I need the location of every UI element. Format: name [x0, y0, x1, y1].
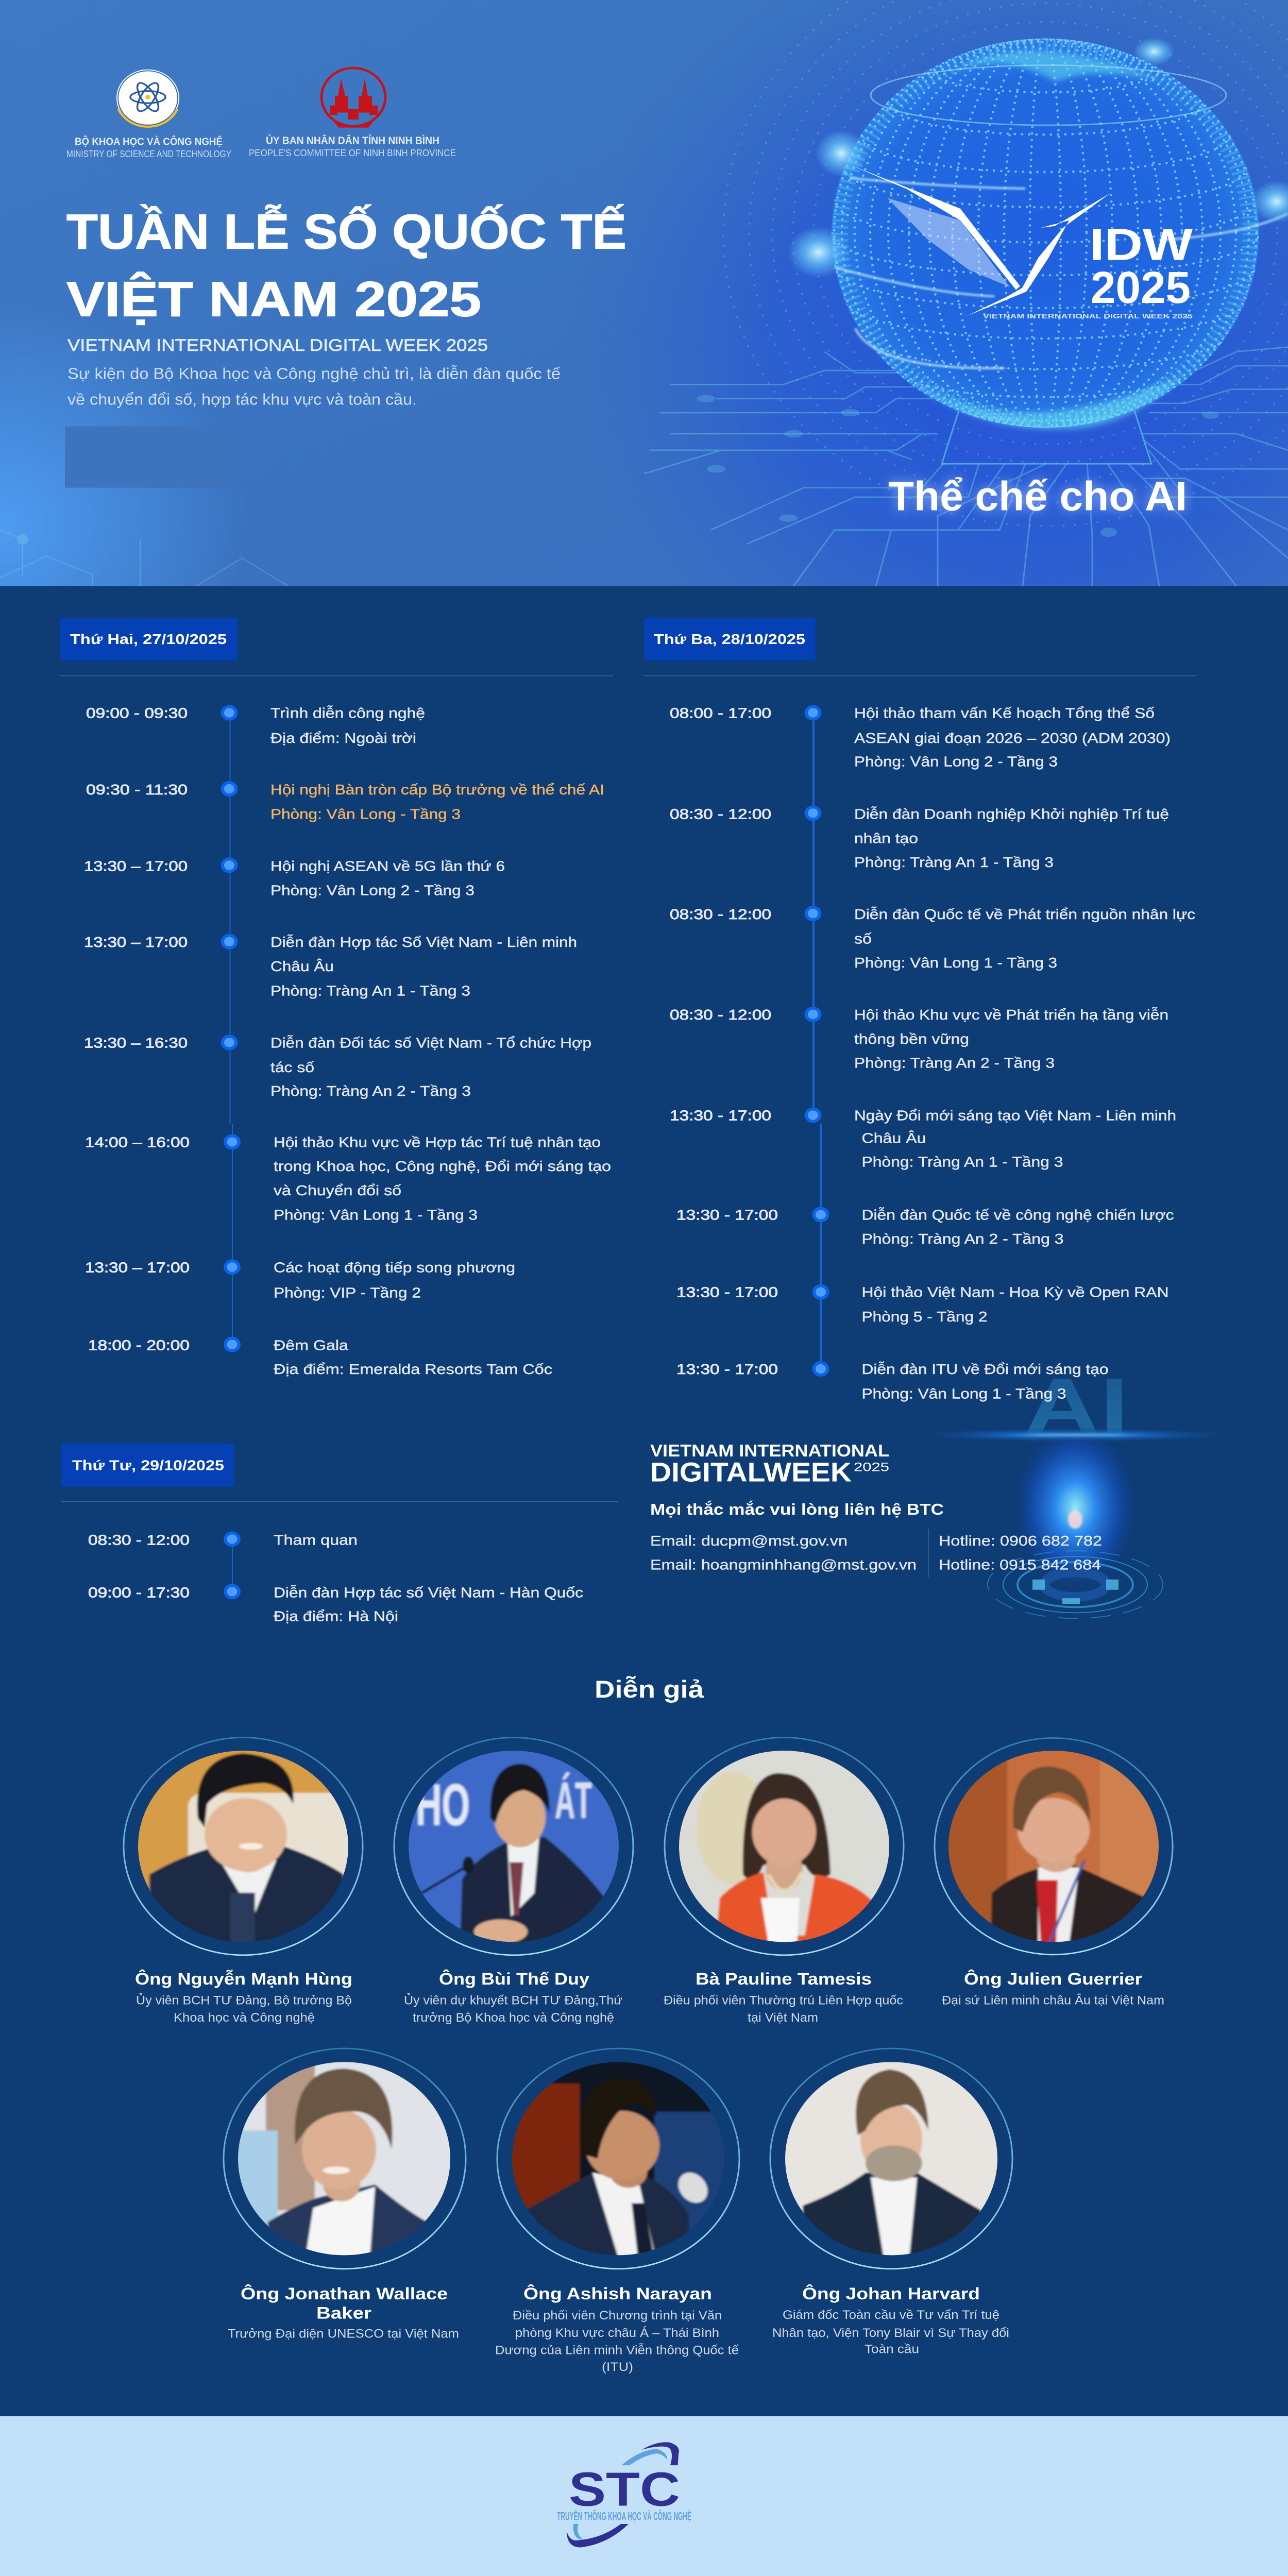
speaker 4: Ông Julien Guerrier: [964, 1969, 1142, 1989]
Tue item 7: 13:30 - 17:00: [676, 1285, 778, 1300]
Tue item 4: [670, 1007, 1168, 1071]
title: TUẦN LỄ SỐ QUỐC TẾ: [66, 205, 626, 259]
Mon item 4: 13:30 – 17:00: [84, 935, 188, 950]
VIDW wordmark: 2025: [854, 1461, 889, 1474]
Tue item 4: Hội thảo Khu vực về Phát triển hạ tầng viễn: [854, 1007, 1168, 1023]
Tuesday timeline line: [814, 713, 821, 1369]
Monday timeline line: [230, 713, 232, 1345]
Tue item 7: Hội thảo Việt Nam - Hoa Kỳ về Open RAN: [861, 1285, 1169, 1300]
speaker 2: [394, 1737, 633, 2025]
Tue item 6: 13:30 - 17:00: [676, 1208, 778, 1223]
VIDW wordmark: [650, 1442, 889, 1487]
speaker 6: Điều phối viên Chương trình tại Văn: [513, 2309, 722, 2323]
Mon item 6: [85, 1134, 611, 1223]
Tue item 6: Phòng: Tràng An 2 - Tầng 3: [861, 1231, 1063, 1247]
emails: Email: ducpm@mst.gov.vn: [650, 1533, 848, 1549]
logo: people's committee of Ninh Binh: ỦY BAN NHÂN DÂN TỈNH NINH BÌNH: [266, 134, 439, 146]
title: VIỆT NAM 2025: [66, 272, 481, 327]
speaker 1: Ủy viên BCH TƯ Đảng, Bộ trưởng Bộ: [136, 1993, 352, 2007]
Tue item 2: Phòng: Tràng An 1 - Tầng 3: [854, 855, 1054, 871]
Tue item 5: 13:30 - 17:00: [670, 1108, 771, 1124]
circuit board lines: [644, 347, 1288, 586]
Mon item 7: Phòng: VIP - Tầng 2: [274, 1285, 421, 1301]
Tue item 8: 13:30 - 17:00: [676, 1362, 778, 1378]
Mon item 5: Phòng: Tràng An 2 - Tầng 3: [270, 1083, 471, 1099]
portrait 1: [135, 1748, 353, 1947]
Tue item 5: [670, 1108, 1176, 1170]
speaker 5: Ông Jonathan Wallace: [241, 2283, 448, 2303]
speaker 1: Ông Nguyễn Mạnh Hùng: [135, 1969, 352, 1989]
Mon item 7: Các hoạt động tiếp song phương: [274, 1260, 515, 1276]
Tue item 3: Phòng: Vân Long 1 - Tầng 3: [854, 955, 1057, 971]
Tue item 8: Phòng: Vân Long 1 - Tầng 3: [861, 1386, 1066, 1402]
Tue item 8: [676, 1361, 1109, 1402]
Mon item 5: [84, 1035, 591, 1099]
title: [66, 205, 626, 327]
panel: Monday schedule: [60, 618, 613, 1378]
Tuesday date tag: [644, 618, 816, 661]
panel: Wednesday schedule: [61, 1444, 618, 1624]
Tue item 6: Diễn đàn Quốc tế về công nghệ chiến lược: [861, 1207, 1174, 1223]
portrait 2: HO: [416, 1773, 470, 1838]
Wednesday date tag: Thứ Tư, 29/10/2025: [72, 1458, 224, 1473]
Tue item 5: Phòng: Tràng An 1 - Tầng 3: [861, 1155, 1063, 1170]
Mon item 2 highlighted: Hội nghị Bàn tròn cấp Bộ trưởng về thể chế AI: [270, 782, 604, 798]
Mon item 8: 18:00 - 20:00: [88, 1338, 190, 1353]
slogan: Thể chế cho AI: [888, 473, 1187, 519]
hotlines: [939, 1533, 1102, 1573]
Mon item 4: [84, 934, 577, 999]
IDW 2025 logo: IDW: [1090, 219, 1193, 269]
Mon item 8: Đêm Gala: [274, 1338, 348, 1353]
Wednesday date tag: [61, 1444, 234, 1486]
Mon item 3: [84, 857, 505, 899]
speaker 2: Ông Bùi Thế Duy: [439, 1969, 589, 1989]
dotted globe: [832, 39, 1259, 429]
Mon item 6: trong Khoa học, Công nghệ, Đổi mới sáng tạo: [274, 1159, 611, 1175]
logo: people's committee of Ninh Binh: [249, 68, 456, 159]
speaker 7: Ông Johan Harvard: [802, 2283, 980, 2303]
Wed item 2: 09:00 - 17:30: [88, 1585, 190, 1601]
Monday date tag: [60, 618, 238, 661]
Tue item 2: nhân tạo: [854, 831, 918, 846]
Mon item 1: Trình diễn công nghệ: [270, 705, 425, 721]
Tue item 1: Phòng: Vân Long 2 - Tầng 3: [854, 754, 1058, 770]
speaker 6: [495, 2048, 739, 2374]
speaker 3: [664, 1737, 904, 2025]
Mon item 1: 09:00 - 09:30: [86, 706, 188, 721]
Mon item 3: Hội nghị ASEAN về 5G lần thứ 6: [270, 859, 505, 874]
Mon item 4: Châu Âu: [270, 958, 334, 975]
Mon item 2 highlighted: [86, 781, 604, 822]
speaker 3: Bà Pauline Tamesis: [696, 1970, 872, 1989]
Mon item 8: Địa điểm: Emeralda Resorts Tam Cốc: [274, 1362, 552, 1378]
speaker 2: Ủy viên dự khuyết BCH TƯ Đảng,Thứ: [404, 1993, 622, 2007]
Mon item 5: 13:30 – 16:30: [84, 1036, 188, 1051]
speaker 5: Trưởng Đại diện UNESCO tại Việt Nam: [228, 2327, 459, 2341]
Wed item 1: 08:30 - 12:00: [88, 1533, 190, 1548]
Tue item 3: số: [854, 931, 872, 947]
Mon item 7: 13:30 – 17:00: [85, 1260, 190, 1276]
speaker 5: Baker: [316, 2304, 371, 2323]
footer band: [0, 2416, 1288, 2576]
Tue item 1: ASEAN giai đoạn 2026 – 2030 (ADM 2030): [854, 731, 1171, 746]
Tue item 8: Diễn đàn ITU về Đổi mới sáng tạo: [861, 1361, 1109, 1378]
speaker 5: [224, 2048, 466, 2341]
Mon item 2 highlighted: 09:30 - 11:30: [86, 782, 188, 798]
Tue item 1: Hội thảo tham vấn Kế hoạch Tổng thể Số: [854, 706, 1155, 721]
logo: ministry of science and technology: BỘ KHOA HỌC VÀ CÔNG NGHỆ: [75, 135, 223, 147]
speaker 7: [770, 2048, 1012, 2356]
hotlines: Hotline: 0915 842 684: [939, 1557, 1101, 1573]
Tue item 4: 08:30 - 12:00: [670, 1007, 771, 1023]
logo: people's committee of Ninh Binh: PEOPLE'S COMMITTEE OF NINH BINH PROVINCE: [249, 148, 456, 159]
portrait 6: [510, 2060, 726, 2257]
VIDW wordmark: DIGITALWEEK: [650, 1457, 852, 1487]
portrait 2: ÁT: [555, 1772, 592, 1829]
Wed item 1: Tham quan: [274, 1533, 358, 1548]
Tuesday date tag: Thứ Ba, 28/10/2025: [654, 632, 805, 647]
text: TRUYỀN THÔNG KHOA HỌC VÀ CÔNG NGHỆ: [557, 2510, 691, 2522]
chip base: [942, 405, 1151, 464]
speaker 7: Giám đốc Toàn cầu về Tư vấn Trí tuệ: [783, 2308, 999, 2322]
Tue item 2: 08:30 - 12:00: [670, 806, 771, 822]
Tue item 5: Châu Âu: [861, 1130, 926, 1146]
IDW 2025 logo: [850, 164, 1193, 320]
speaker 3: Điều phối viên Thường trú Liên Hợp quốc: [664, 1993, 903, 2007]
Wed item 2: [88, 1584, 583, 1624]
IDW 2025 logo: VIETNAM INTERNATIONAL DIGITAL WEEK 2025: [983, 313, 1193, 320]
Mon item 2 highlighted: Phòng: Vân Long - Tầng 3: [270, 806, 461, 822]
tech glow illustration: [905, 1421, 1245, 1618]
description: về chuyển đổi số, hợp tác khu vực và toàn cầu.: [67, 391, 417, 408]
Tue item 3: 08:30 - 12:00: [670, 907, 771, 923]
decorative tech lines bottom left: [0, 530, 289, 586]
hotlines: Hotline: 0906 682 782: [939, 1533, 1102, 1549]
speaker 6: Dương của Liên minh Viễn thông Quốc tế: [495, 2343, 739, 2357]
speaker 1: Khoa học và Công nghệ: [174, 2011, 315, 2025]
panel: contact: [650, 1442, 1102, 1577]
Wed item 2: Diễn đàn Hợp tác số Việt Nam - Hàn Quốc: [274, 1585, 583, 1601]
Tue item 3: [670, 906, 1195, 971]
Mon item 5: tác số: [270, 1060, 314, 1075]
portrait 2: [405, 1748, 622, 1945]
hero banner: [0, 0, 1288, 586]
speakers heading: Diễn giả: [595, 1675, 704, 1703]
STC logo: [557, 2442, 691, 2547]
Mon item 6: 14:00 – 16:00: [85, 1135, 190, 1150]
Mon item 1: [86, 705, 425, 746]
Mon item 3: Phòng: Vân Long 2 - Tầng 3: [270, 883, 474, 899]
Mon item 6: và Chuyển đổi số: [274, 1183, 401, 1199]
portrait 7: [783, 2060, 999, 2257]
orbit rings and glows: [788, 38, 1288, 368]
Tue item 5: Ngày Đổi mới sáng tạo Việt Nam - Liên minh: [854, 1108, 1176, 1124]
emails: [650, 1533, 917, 1573]
speaker 2: trưởng Bộ Khoa học và Công nghệ: [413, 2011, 614, 2025]
blank panel: [65, 426, 247, 488]
speaker 3: tại Việt Nam: [748, 2011, 818, 2025]
panel: Tuesday schedule: [644, 618, 1196, 1402]
description: Sự kiện do Bộ Khoa học và Công nghệ chủ trì, là diễn đàn quốc tế: [67, 364, 561, 382]
Mon item 6: Hội thảo Khu vực về Hợp tác Trí tuệ nhân tạo: [274, 1135, 601, 1150]
portrait 5: [236, 2060, 452, 2257]
Mon item 1: Địa điểm: Ngoài trời: [270, 731, 416, 746]
VIDW wordmark: VIETNAM INTERNATIONAL: [650, 1442, 889, 1461]
speaker 6: Ông Ashish Narayan: [523, 2283, 712, 2303]
portrait 4: [945, 1748, 1162, 1945]
Monday date tag: Thứ Hai, 27/10/2025: [70, 632, 227, 647]
contact heading: Mọi thắc mắc vui lòng liên hệ BTC: [650, 1500, 944, 1518]
Wed item 1: [88, 1531, 358, 1548]
logo: ministry of science and technology: MINISTRY OF SCIENCE AND TECHNOLOGY: [66, 149, 231, 160]
Tue item 1: [670, 705, 1171, 770]
IDW 2025 logo: 2025: [1091, 263, 1191, 313]
Mon item 5: Diễn đàn Đối tác số Việt Nam - Tổ chức Hợp: [270, 1035, 591, 1051]
STC logo: STC: [569, 2463, 680, 2516]
schedule and speakers background: [0, 586, 1288, 2416]
speaker 7: Toàn cầu: [865, 2343, 919, 2356]
speaker 6: phòng Khu vực châu Á – Thái Bình: [515, 2326, 719, 2340]
Tue item 1: 08:00 - 17:00: [670, 706, 771, 721]
Tue item 6: [676, 1207, 1174, 1247]
Tue item 2: [670, 805, 1169, 871]
slogan: Thể chế cho AI: [888, 473, 1187, 519]
Mon item 7: [85, 1259, 515, 1301]
Tue item 2: Diễn đàn Doanh nghiệp Khởi nghiệp Trí tuệ: [854, 806, 1169, 822]
Tue item 3: Diễn đàn Quốc tế về Phát triển nguồn nhân lực: [854, 906, 1195, 923]
portrait 3: [676, 1748, 892, 1945]
speaker 7: Nhân tạo, Viện Tony Blair vì Sự Thay đổi: [772, 2326, 1009, 2340]
outer faint dot halo: [723, 0, 1288, 526]
Tue item 4: thông bền vững: [854, 1031, 969, 1047]
speaker 4: Đại sứ Liên minh châu Âu tại Việt Nam: [942, 1993, 1164, 2007]
speaker 6: (ITU): [602, 2360, 633, 2374]
Mon item 6: Phòng: Vân Long 1 - Tầng 3: [274, 1208, 478, 1223]
subtitle: VIETNAM INTERNATIONAL DIGITAL WEEK 2025: [67, 336, 488, 354]
Wednesday timeline line: [232, 1539, 233, 1592]
Mon item 4: Phòng: Tràng An 1 - Tầng 3: [270, 984, 470, 999]
description: [67, 364, 561, 408]
Mon item 4: Diễn đàn Hợp tác Số Việt Nam - Liên minh: [270, 934, 577, 950]
speaker 1: [124, 1737, 363, 2025]
speaker 4: [935, 1738, 1173, 2007]
AI watermark: AI: [1024, 1363, 1129, 1450]
Tue item 7: [676, 1284, 1168, 1325]
Mon item 8: [88, 1337, 552, 1378]
logo: ministry of science and technology: [66, 70, 231, 160]
Wed item 2: Địa điểm: Hà Nội: [274, 1609, 398, 1624]
Mon item 3: 13:30 – 17:00: [84, 859, 188, 874]
Tue item 7: Phòng 5 - Tầng 2: [861, 1309, 987, 1325]
emails: Email: hoangminhhang@mst.gov.vn: [650, 1557, 917, 1573]
Tue item 4: Phòng: Tràng An 2 - Tầng 3: [854, 1056, 1055, 1071]
